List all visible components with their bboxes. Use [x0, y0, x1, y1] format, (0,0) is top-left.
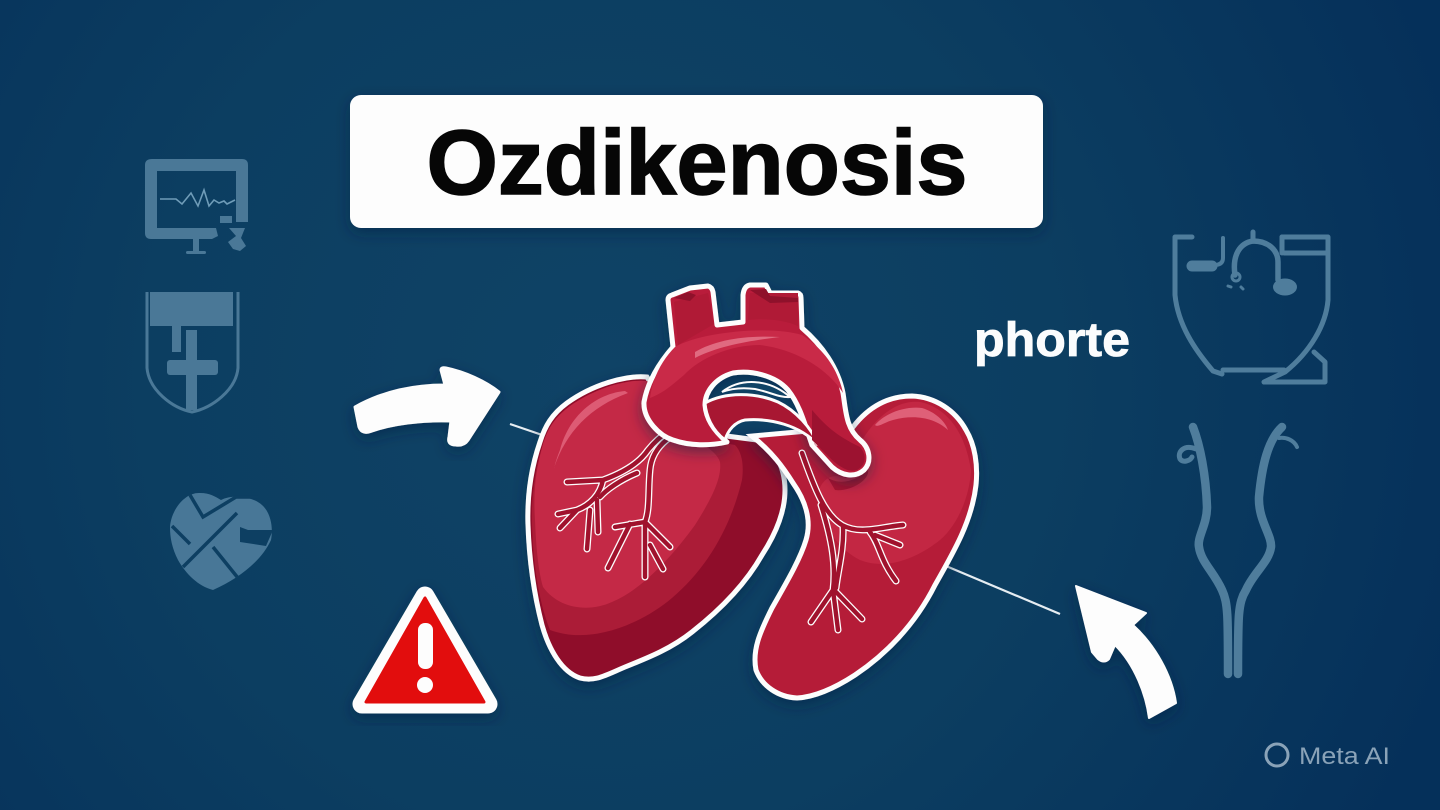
- aorta arch: [644, 285, 869, 475]
- leader line: left: [510, 424, 548, 437]
- left lobe: [528, 377, 785, 679]
- inner vessel: [705, 395, 818, 445]
- icon: forked tube: [1179, 427, 1297, 674]
- label: phorte: phorte: [974, 314, 1130, 367]
- logo: Meta AI: [1266, 743, 1390, 770]
- leader line: right: [946, 566, 1060, 614]
- pulmonary branches, right lobe: [802, 453, 903, 630]
- icon: shield with cross: [147, 292, 238, 412]
- title banner: [350, 95, 1043, 228]
- icon: broken heart with cross: [170, 493, 273, 590]
- illustration: heart: [528, 285, 977, 698]
- arrow: left: [355, 368, 499, 445]
- icon: warning triangle: [362, 596, 488, 704]
- pulmonary branches, left lobe: [558, 413, 703, 577]
- icon: monitor with heartbeat: [145, 159, 248, 254]
- logo: Meta AI: Meta AI: [1299, 743, 1390, 770]
- title banner: Ozdikenosis: [426, 112, 968, 214]
- icon: medical bag with stethoscope: [1175, 232, 1328, 382]
- arrow: right: [1076, 586, 1176, 718]
- right lobe: [752, 396, 977, 698]
